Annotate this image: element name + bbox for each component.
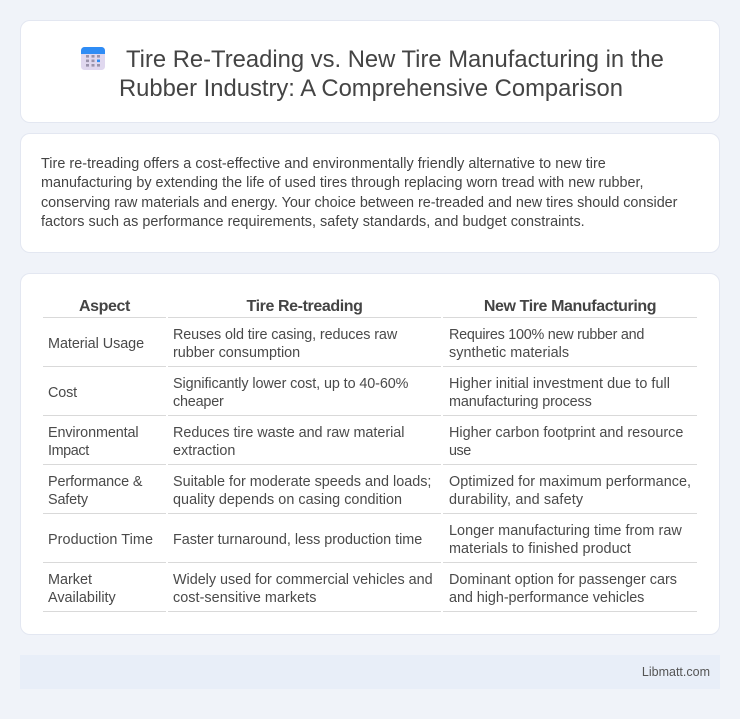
row: Material Usage: Material Usage <box>48 336 144 352</box>
column header: Tire Re-treading: Tire Re-treading <box>246 298 362 315</box>
column header: New Tire Manufacturing: New Tire Manufacturing <box>484 298 656 315</box>
row: Performance & Safety: Optimized for maximum performance, <box>449 474 691 490</box>
row: Market Availability: cost-sensitive markets <box>173 590 316 606</box>
icon: calendar <box>81 47 105 70</box>
row: Performance & Safety: durability, and safety <box>449 492 583 508</box>
description text: Tire re-treading offers a cost-effective and environmentally friendly alternative to new tire <box>41 156 606 172</box>
row: Material Usage: Reuses old tire casing, reduces raw <box>173 327 397 343</box>
row: Market Availability <box>48 572 677 606</box>
title line 1: Tire Re-Treading vs. New Tire Manufacturing in the <box>126 46 664 73</box>
row: Material Usage: synthetic materials <box>449 345 569 361</box>
row: Production Time: materials to finished product <box>449 541 631 557</box>
description text: conserving raw materials and energy. Your choice between re-treaded and new tires should consider <box>41 195 677 211</box>
row: Cost: Cost <box>48 385 77 401</box>
row: Performance & Safety: quality depends on casing condition <box>173 492 402 508</box>
row: Performance & Safety: Performance & <box>48 474 142 490</box>
row: Environmental Impact: Impact <box>48 443 89 459</box>
row: Performance & Safety: Safety <box>48 492 88 508</box>
row: Production Time: Longer manufacturing time from raw <box>449 523 682 539</box>
row: Production Time <box>48 523 682 557</box>
row: Environmental Impact <box>48 425 683 459</box>
panel: title card <box>20 20 720 123</box>
title line 2: Rubber Industry: A Comprehensive Comparison <box>119 75 623 102</box>
row: Cost: Higher initial investment due to full <box>449 376 670 392</box>
row: Production Time: Faster turnaround, less production time <box>173 532 422 548</box>
row: Environmental Impact: use <box>449 443 471 459</box>
description text <box>41 156 678 230</box>
row: Environmental Impact: Higher carbon footprint and resource <box>449 425 683 441</box>
row: Performance & Safety <box>48 474 691 508</box>
row: Market Availability: Dominant option for passenger cars <box>449 572 677 588</box>
row: Material Usage <box>48 327 644 361</box>
row: Cost <box>48 376 670 410</box>
row: Environmental Impact: extraction <box>173 443 235 459</box>
row: Market Availability: Availability <box>48 590 116 606</box>
row: Material Usage: rubber consumption <box>173 345 300 361</box>
row: Environmental Impact: Environmental <box>48 425 138 441</box>
footer text: Libmatt.com <box>642 665 710 679</box>
row: Market Availability: Widely used for commercial vehicles and <box>173 572 433 588</box>
row: Performance & Safety: Suitable for moderate speeds and loads; <box>173 474 431 490</box>
row: Environmental Impact: Reduces tire waste and raw material <box>173 425 404 441</box>
row: Cost: manufacturing process <box>449 394 592 410</box>
description text: manufacturing by extending the life of used tires through replacing worn tread with new rubber, <box>41 175 644 191</box>
column header: Aspect: Aspect <box>79 298 130 315</box>
row: Production Time: Production Time <box>48 532 153 548</box>
row: Market Availability: and high-performance vehicles <box>449 590 644 606</box>
row: Cost: Significantly lower cost, up to 40-60% <box>173 376 408 392</box>
row: Material Usage: Requires 100% new rubber and <box>449 327 644 343</box>
row: Market Availability: Market <box>48 572 92 588</box>
panel: description card <box>20 133 720 253</box>
row: Cost: cheaper <box>173 394 224 410</box>
footer bar <box>20 655 720 689</box>
panel: comparison table card <box>20 273 720 635</box>
description text: factors such as performance requirements, safety standards, and budget constraints. <box>41 214 585 230</box>
